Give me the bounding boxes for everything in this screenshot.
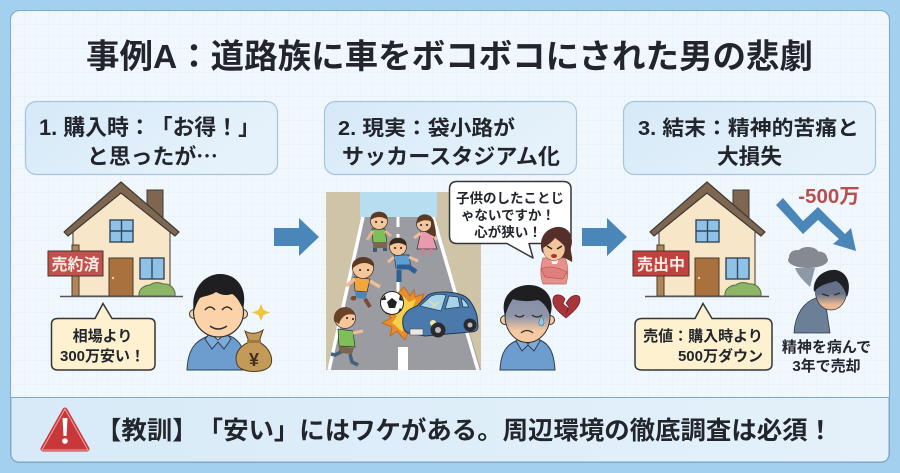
callout: angry speech bubble: ゃないですか！ (461, 208, 555, 223)
kid: orange shirt (346, 257, 380, 307)
callout: angry speech bubble: 子供のしたことじ (456, 191, 564, 206)
sign: sold: 売約済 (51, 255, 100, 274)
icon: broken heart (553, 295, 580, 318)
callout: 300万安い: 300万安い！ (60, 347, 145, 365)
callout: angry speech bubble (450, 182, 571, 258)
panel: step 3 heading (624, 102, 876, 174)
lesson text: 【教訓】「安い」にはワケがある。周辺環境の徹底調査は必須！ (96, 416, 833, 445)
kid: green shirt top (367, 212, 391, 252)
illustration: street scene (326, 192, 481, 370)
sign: sold (48, 251, 103, 276)
caption: sold in 3 years: 3年で売却 (792, 357, 861, 375)
banner: lesson (11, 398, 889, 462)
icon: depressed man (794, 270, 849, 333)
icon: storm cloud (788, 247, 828, 287)
kid: blue shirt (388, 238, 418, 282)
icon: sad man (500, 285, 555, 370)
kid: green shirt bottom (331, 308, 363, 365)
caption: sold in 3 years: 精神を病んで (782, 338, 871, 356)
arrow: step 1 to step 2 (274, 218, 319, 256)
title: 事例A：道路族に車をボコボコにされた男の悲劇 (86, 39, 813, 76)
explosion (382, 287, 424, 340)
panel: step 2 heading: 2. 現実：袋小路が (338, 116, 516, 140)
sign: for sale (633, 251, 689, 276)
callout: 500万ダウン: 売値：購入時より (643, 327, 763, 345)
callout: 300万安い (52, 304, 155, 370)
sign: for sale: 売出中 (637, 256, 685, 274)
icon: warning triangle (42, 409, 88, 450)
icon: money bag: ¥ (249, 350, 259, 370)
panel: step 1 heading (26, 102, 278, 174)
panel: step 1 heading: 1. 購入時：「お得！」 (39, 115, 260, 140)
car (403, 292, 478, 338)
callout: 300万安い: 相場より (73, 328, 132, 345)
panel: step 3 heading: 大損失 (717, 145, 782, 169)
icon: for sale house (645, 182, 769, 296)
icon: sold house (60, 182, 183, 296)
icon: sparkle (252, 304, 270, 321)
soccer ball (380, 292, 404, 314)
panel: step 2 heading (324, 102, 576, 174)
panel: step 3 heading: 3. 結末：精神的苦痛と (638, 117, 859, 140)
icon: angry woman (541, 227, 572, 284)
icon: money bag (236, 330, 272, 372)
caption: sold in 3 years (782, 338, 871, 375)
kid: pink girl (414, 214, 437, 256)
callout: angry speech bubble: 心が狭い！ (474, 224, 542, 240)
callout: 500万ダウン: 500万ダウン (678, 347, 763, 365)
icon: happy man (187, 274, 248, 370)
callout: 500万ダウン (635, 304, 772, 370)
arrow: falling loss (776, 198, 856, 251)
label: -500万: -500万 (798, 185, 860, 208)
arrow: step 2 to step 3 (582, 218, 627, 256)
panel: step 2 heading: サッカースタジアム化 (342, 145, 560, 169)
panel: step 1 heading: と思ったが… (87, 140, 218, 171)
